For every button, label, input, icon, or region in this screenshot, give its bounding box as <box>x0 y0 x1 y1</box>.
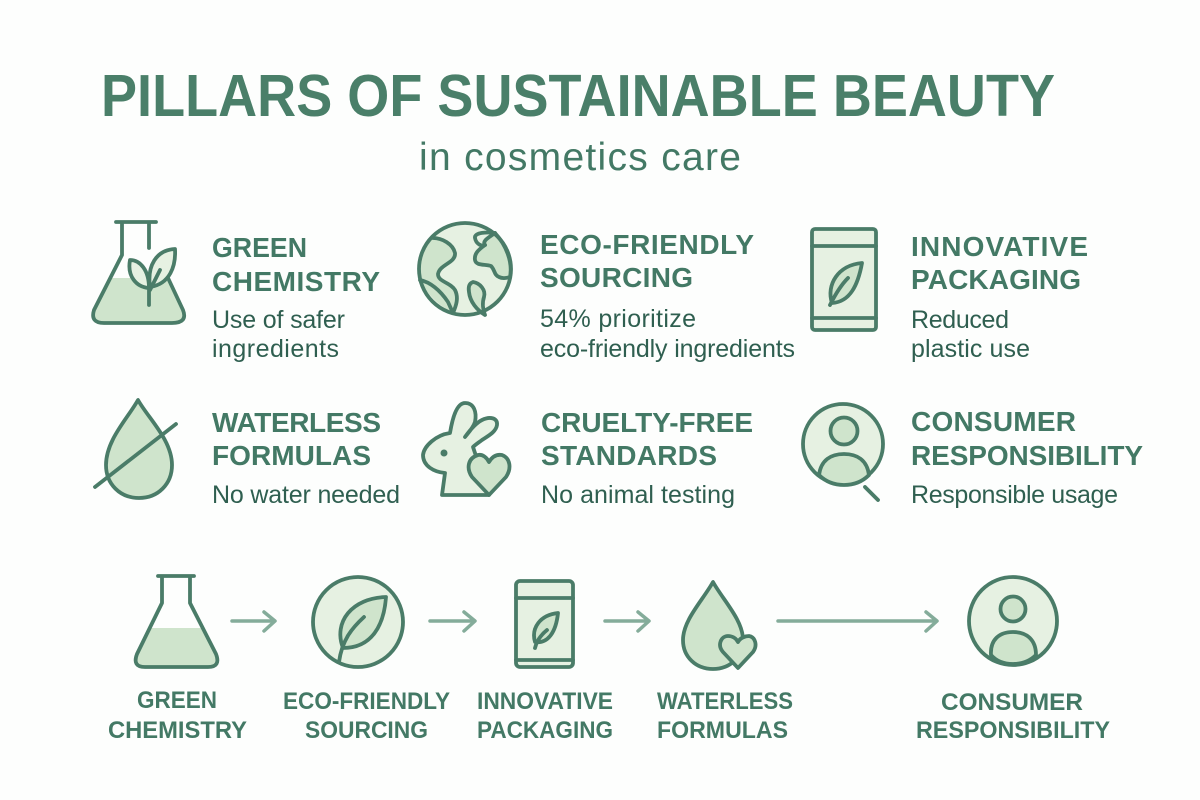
label: eco-friendly sourcing <box>283 688 450 744</box>
label: eco-friendly sourcing: ECO-FRIENDLY <box>283 688 450 715</box>
text: 54% statistic: 54% prioritize <box>540 305 696 333</box>
text: no water: No water needed <box>212 481 400 509</box>
panel: consumer responsibility <box>803 404 1143 509</box>
panel: waterless formulas <box>95 400 400 509</box>
label: green chemistry: CHEMISTRY <box>108 717 247 744</box>
step: eco-friendly sourcing <box>283 577 450 744</box>
title: PILLARS OF SUSTAINABLE BEAUTY <box>101 64 1055 130</box>
icon: package <box>516 581 573 667</box>
label: consumer responsibility: RESPONSIBILITY <box>916 717 1110 744</box>
step: waterless formulas <box>657 582 793 744</box>
text: no animal testing: No animal testing <box>541 481 735 509</box>
process flow <box>108 576 1110 744</box>
heading: green chemistry: CHEMISTRY <box>212 266 380 297</box>
icon: flask with sprout <box>93 222 184 323</box>
heading: eco-friendly sourcing: ECO-FRIENDLY <box>540 229 754 260</box>
step: green chemistry <box>108 576 247 744</box>
subtitle: in cosmetics care <box>419 136 741 179</box>
icon: crossed water drop <box>95 400 176 498</box>
text: safer ingredients: Use of safer <box>212 306 345 334</box>
heading: eco-friendly sourcing: SOURCING <box>540 262 693 293</box>
icon: package with leaf <box>812 229 876 330</box>
heading: innovative packaging: PACKAGING <box>911 264 1081 295</box>
label: innovative packaging: INNOVATIVE <box>477 688 613 715</box>
text: responsible usage: Responsible usage <box>911 481 1118 509</box>
label: eco-friendly sourcing: SOURCING <box>305 717 428 744</box>
icon: person in circle <box>969 577 1057 665</box>
label: green chemistry <box>108 687 247 744</box>
heading: innovative packaging: INNOVATIVE <box>911 231 1088 262</box>
step: consumer responsibility <box>916 577 1110 744</box>
heading: waterless formulas: WATERLESS <box>212 407 381 438</box>
step: innovative packaging <box>477 581 613 744</box>
text: reduced plastic <box>911 306 1030 363</box>
arrow: step 3 to 4 <box>605 612 649 631</box>
label: consumer responsibility <box>916 689 1110 744</box>
heading: consumer responsibility <box>911 406 1143 471</box>
panel: green chemistry <box>93 222 380 363</box>
heading: green chemistry <box>212 232 380 297</box>
arrow: step 4 to 5 <box>778 612 937 631</box>
label: consumer responsibility: CONSUMER <box>941 689 1083 716</box>
heading: cruelty-free standards: CRUELTY-FREE <box>541 407 753 438</box>
heading: cruelty-free standards: STANDARDS <box>541 440 717 471</box>
label: green chemistry: GREEN <box>137 687 217 714</box>
text: safer ingredients: ingredients <box>212 335 339 363</box>
heading: consumer responsibility: RESPONSIBILITY <box>911 440 1143 471</box>
label: waterless formulas: FORMULAS <box>657 717 788 744</box>
icon: drop with heart <box>683 582 756 669</box>
heading: cruelty-free standards <box>541 407 753 471</box>
heading: innovative packaging <box>911 231 1088 295</box>
icon: rabbit with heart <box>423 403 509 495</box>
text: reduced plastic: plastic use <box>911 335 1030 363</box>
panel: eco-friendly sourcing <box>419 223 795 363</box>
panel: innovative packaging <box>812 229 1088 363</box>
icon: flask <box>136 576 217 667</box>
arrow: step 1 to 2 <box>232 612 275 631</box>
heading: green chemistry: GREEN <box>212 232 307 263</box>
text: reduced plastic: Reduced <box>911 306 1009 334</box>
text: 54% statistic <box>540 305 795 363</box>
label: waterless formulas <box>657 688 793 744</box>
heading: waterless formulas <box>212 407 381 471</box>
panel: cruelty-free standards <box>423 403 753 509</box>
label: innovative packaging <box>477 688 613 744</box>
icon: person in magnifier <box>803 404 883 500</box>
label: waterless formulas: WATERLESS <box>657 688 793 715</box>
heading: waterless formulas: FORMULAS <box>212 440 371 471</box>
arrow: step 2 to 3 <box>430 612 475 631</box>
text: 54% statistic: eco-friendly ingredients <box>540 335 795 363</box>
heading: eco-friendly sourcing <box>540 229 754 293</box>
text: safer ingredients <box>212 306 345 363</box>
icon: globe <box>419 223 511 315</box>
icon: leaf in circle <box>313 577 403 667</box>
label: innovative packaging: PACKAGING <box>477 717 613 744</box>
heading: consumer responsibility: CONSUMER <box>911 406 1076 437</box>
